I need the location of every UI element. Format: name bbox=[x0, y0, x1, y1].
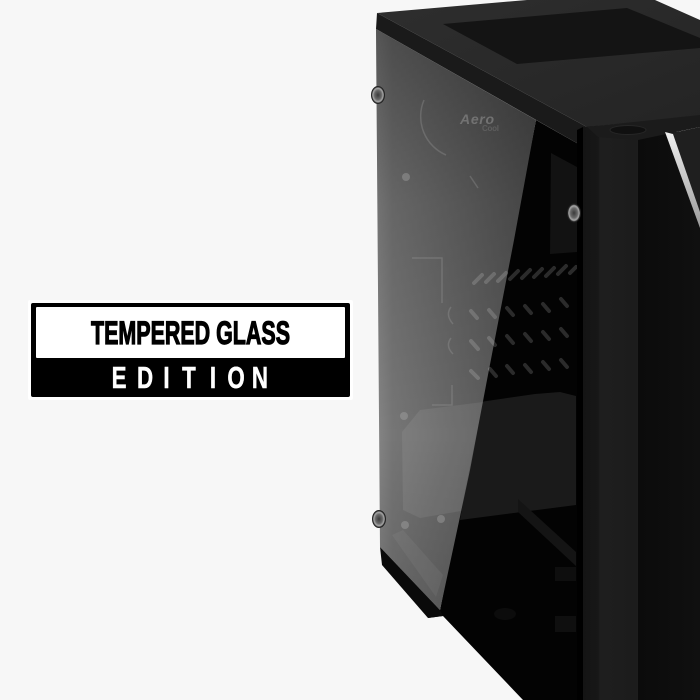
glass side panel bbox=[376, 29, 536, 610]
top mesh vent bbox=[443, 8, 700, 64]
ghosted logo: Aero bbox=[459, 111, 494, 127]
top front edge bbox=[376, 13, 587, 146]
ghosted components behind glass bbox=[412, 100, 478, 405]
power supply shroud bbox=[460, 392, 576, 520]
ghosted mounting dots bbox=[400, 173, 445, 529]
screw: bottom left bbox=[372, 510, 386, 528]
screws bbox=[372, 86, 580, 528]
case top surface bbox=[377, 0, 700, 127]
dark interior bbox=[428, 120, 583, 700]
badge white panel bbox=[36, 307, 345, 358]
subheading: EDITION bbox=[112, 360, 268, 395]
heading: TEMPERED GLASS bbox=[91, 315, 290, 351]
badge: tempered glass edition bbox=[28, 300, 353, 400]
ghosted logo bbox=[459, 111, 499, 133]
badge black frame bbox=[31, 303, 350, 397]
badge halo bbox=[28, 300, 353, 400]
ghosted power supply behind glass bbox=[402, 402, 483, 518]
power button bbox=[610, 126, 646, 134]
screw: middle bbox=[568, 204, 580, 222]
glass panel shading bbox=[376, 29, 536, 610]
ghosted lower glass band bbox=[392, 530, 443, 597]
lower drive bays bbox=[494, 499, 576, 632]
ghosted logo: Cool bbox=[482, 124, 499, 133]
case base black edge bbox=[380, 547, 443, 618]
ventilation slots bbox=[471, 266, 576, 378]
front panel bbox=[638, 130, 700, 700]
inner glass edge bbox=[577, 127, 584, 700]
upper facet beside light strip bbox=[672, 127, 700, 214]
computer case bbox=[372, 0, 700, 700]
upper rear bracket bbox=[550, 153, 577, 254]
light strip bbox=[665, 132, 700, 228]
front pillar bbox=[583, 122, 640, 700]
screw: top left bbox=[372, 86, 384, 104]
front panel top cap bbox=[587, 115, 700, 140]
